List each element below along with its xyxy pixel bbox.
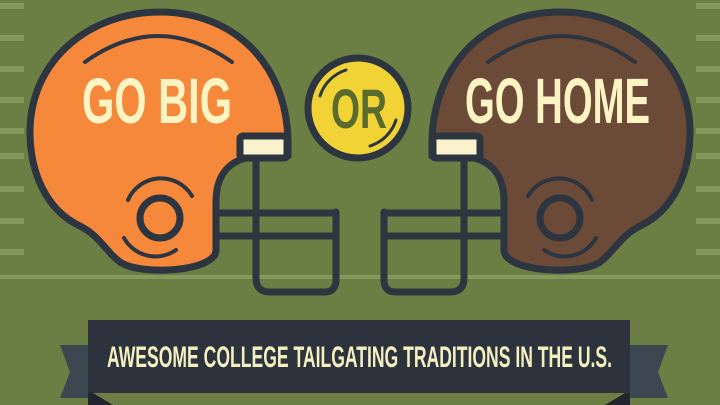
banner ribbon [60,320,668,405]
helmet: orange left [30,12,336,292]
helmet: brown right [384,12,690,292]
OR badge: OR [331,77,387,140]
OR badge [308,58,408,158]
text: GO BIG: GO BIG [82,65,232,137]
